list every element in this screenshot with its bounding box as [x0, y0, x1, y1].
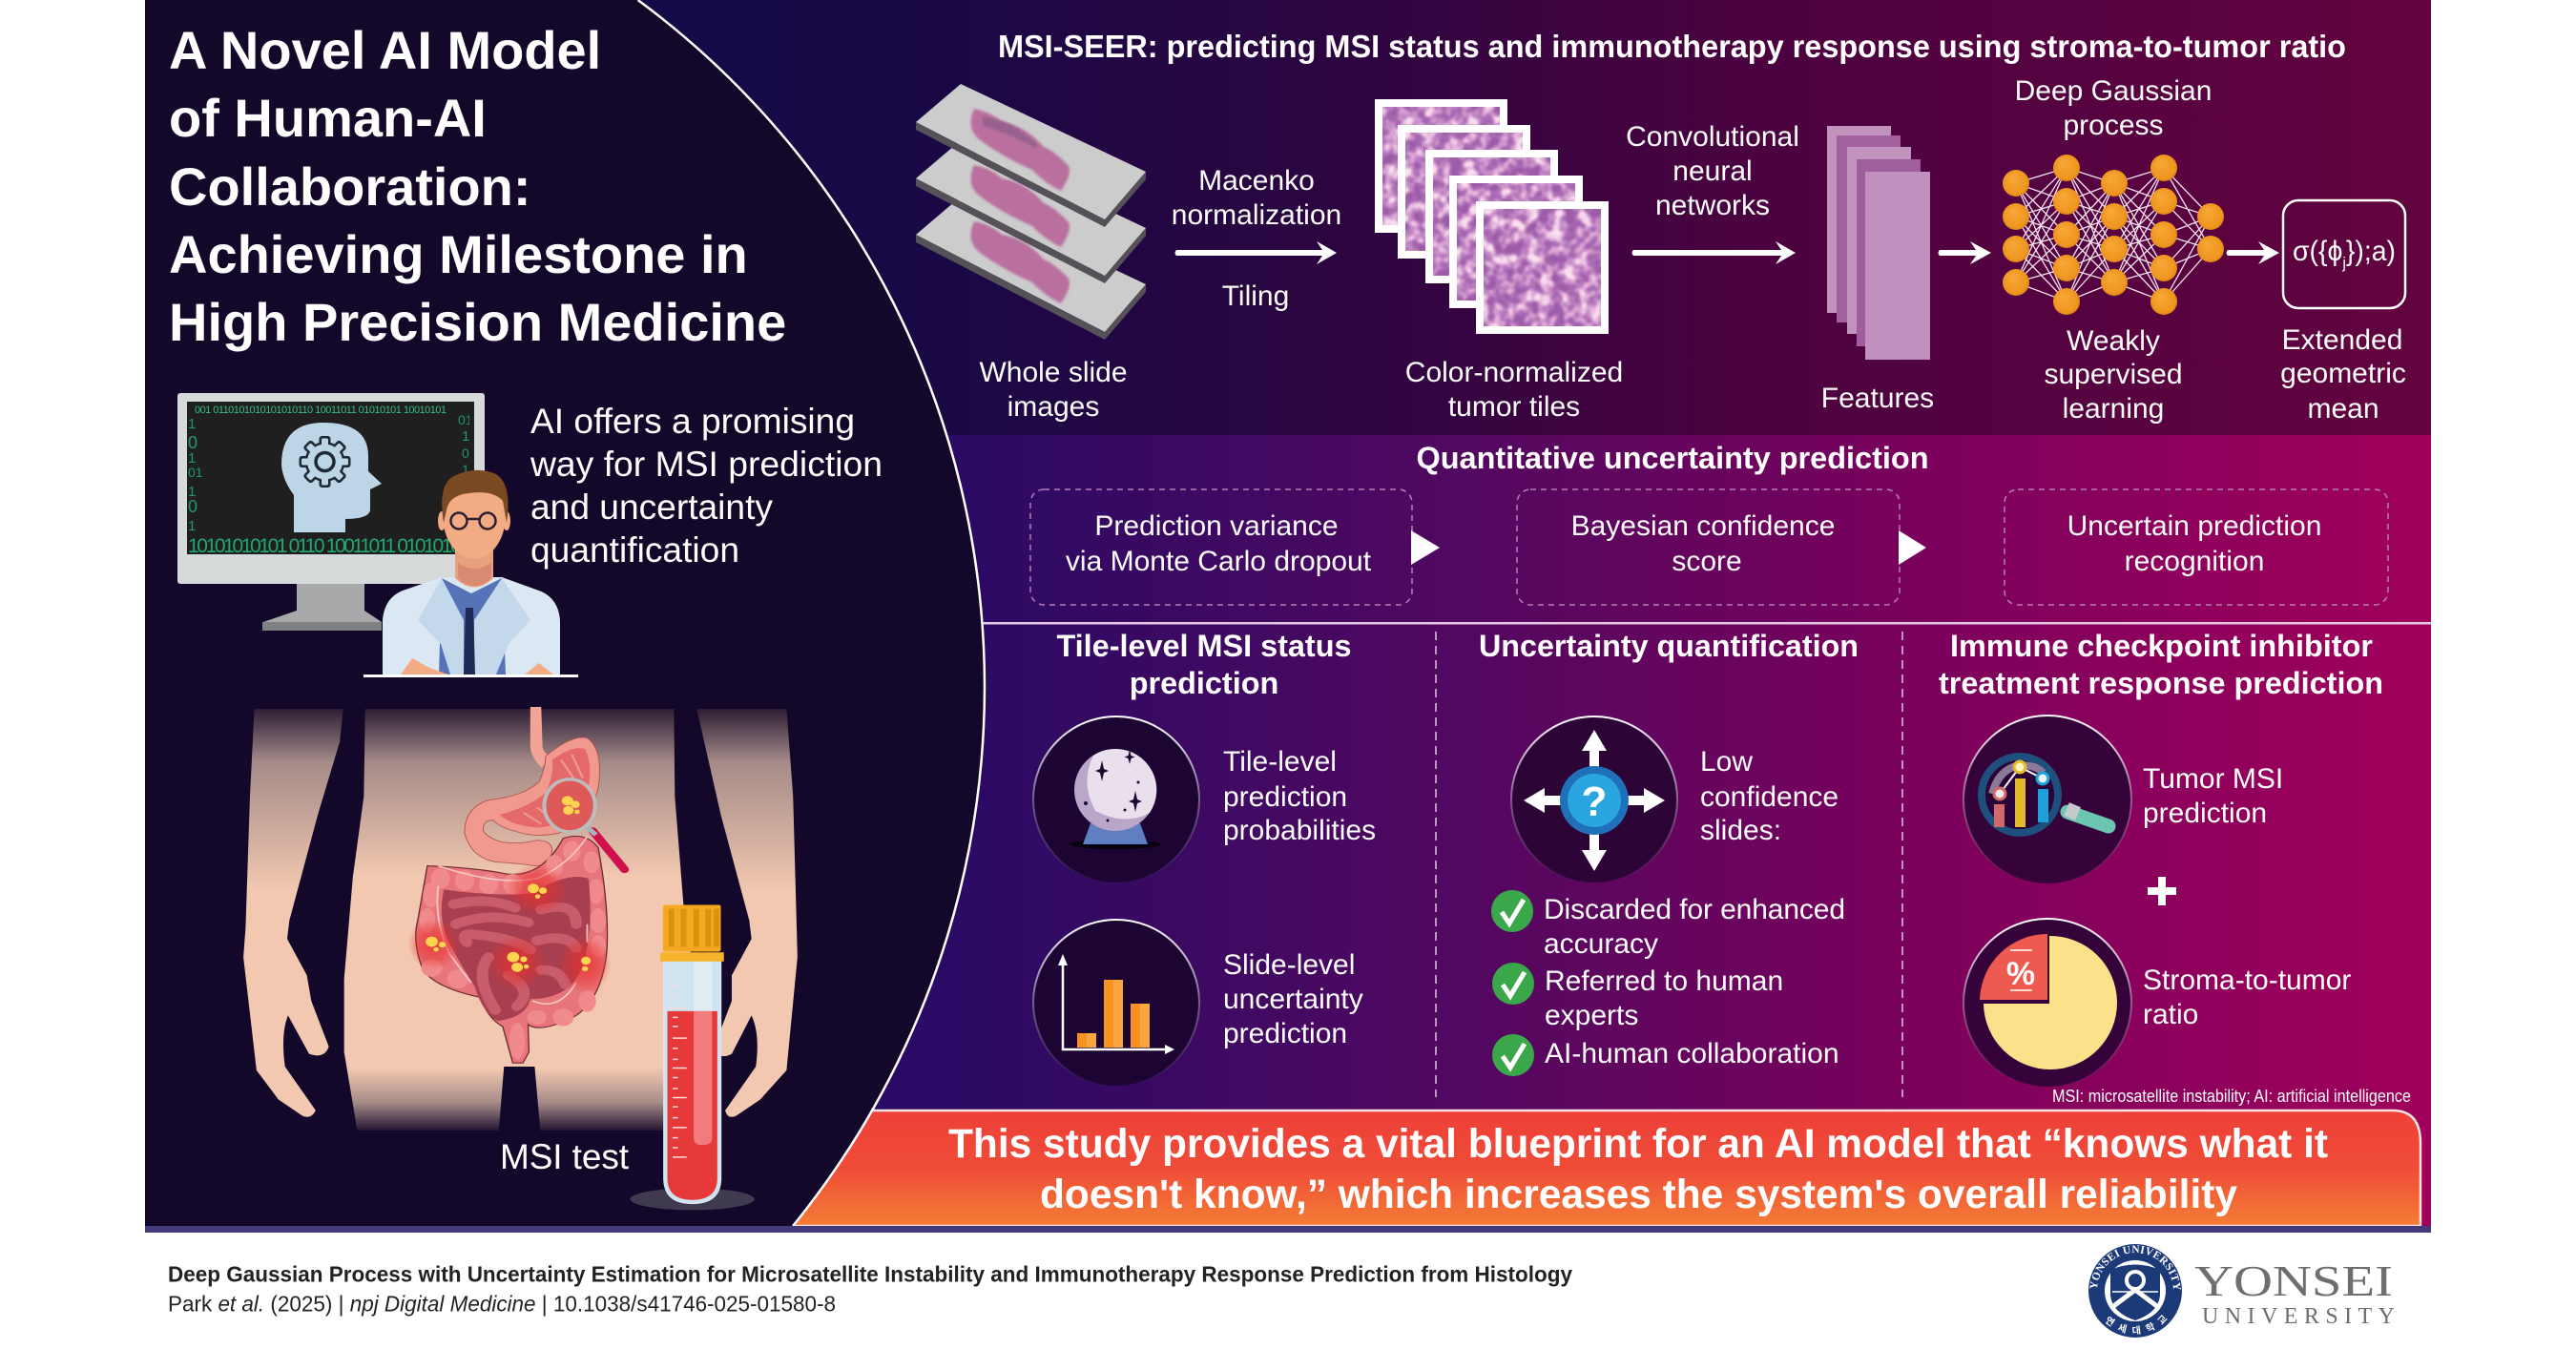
column: uncertainty quantification [1479, 629, 1859, 1076]
colon and small intestine [416, 836, 608, 1063]
text: low confidence slides: Low [1700, 746, 1753, 778]
citation: Deep Gaussian Process with Uncertainty Estimation for Microsatellite Instability and Immunotherapy Response Prediction from Histology [168, 1261, 1572, 1286]
logo: Yonsei University [2088, 1244, 2395, 1338]
label: whole slide images [979, 357, 1128, 423]
callout: conclusion banner text [948, 1121, 2328, 1216]
item: discarded [1491, 890, 1845, 960]
label: convolutional neural networks [1626, 121, 1799, 221]
label: tumor tiles: tumor tiles [1448, 391, 1580, 423]
box: Bayesian confidence score: Bayesian confidence [1571, 510, 1835, 542]
title: Achieving Milestone in [169, 224, 748, 284]
icon: whole slide images [916, 84, 1146, 340]
text: low confidence slides [1700, 746, 1839, 846]
label: extended geometric mean: mean [2307, 393, 2379, 425]
citation: Park et al. (2025) | npj Digital Medicine | 10.1038/s41746-025-01580-8 [168, 1292, 836, 1317]
icon: blood test tube [630, 904, 755, 1210]
callout: conclusion banner text: This study provides a vital blueprint for an AI model that “knows what it [948, 1121, 2328, 1166]
callout: conclusion banner text: doesn't know,” which increases the system's overall reliability [1040, 1172, 2237, 1216]
heading: quantitative uncertainty prediction: Quantitative uncertainty prediction [1416, 441, 1929, 475]
box: formula: j [2341, 254, 2346, 272]
label: tumor tiles: Color-normalized [1405, 357, 1623, 388]
icon: university seal [2088, 1244, 2182, 1338]
title: High Precision Medicine [169, 292, 786, 352]
label: whole slide images: Whole slide [979, 357, 1128, 388]
label: weakly supervised learning: Weakly [2067, 325, 2160, 357]
arrow: CNN [1631, 241, 1796, 264]
icon: AI monitor: 1 [188, 450, 196, 467]
label: whole slide images: images [1008, 391, 1099, 423]
column: immune checkpoint inhibitor response [1939, 629, 2383, 1087]
label: extended geometric mean: geometric [2280, 358, 2406, 389]
label: convolutional neural networks: networks [1655, 190, 1770, 221]
box: uncertain prediction recognition: Uncertain prediction [2067, 510, 2321, 542]
text: slide-level uncertainty prediction: uncertainty [1223, 984, 1363, 1015]
text: tile-level prediction probabilities [1223, 746, 1376, 846]
esophagus and stomach [465, 707, 600, 866]
icon: crystal ball [1033, 716, 1199, 882]
heading: Immune checkpoint inhibitor [1950, 629, 2373, 663]
item: discarded: accuracy [1544, 928, 1658, 960]
label: Macenko normalization: normalization [1172, 199, 1341, 231]
label: convolutional neural networks: Convolutional [1626, 121, 1799, 153]
text: tumor MSI prediction: prediction [2143, 798, 2267, 829]
label: deep Gaussian process: Deep Gaussian [2015, 75, 2212, 107]
icon: AI monitor: 01 [188, 465, 203, 480]
text: slide-level uncertainty prediction: prediction [1223, 1018, 1347, 1049]
box: prediction variance: via Monte Carlo dropout [1066, 546, 1372, 577]
text: tumor MSI prediction [2143, 763, 2283, 829]
box: formula: });a) [2346, 236, 2396, 267]
icon: stroma-to-tumor pie [1963, 919, 2131, 1087]
item: discarded: Discarded for enhanced [1544, 894, 1845, 925]
box: prediction variance [1030, 489, 1412, 605]
arrow: tiling [1175, 241, 1337, 264]
text block: AI offers [530, 402, 883, 570]
icon: plus [2148, 877, 2176, 905]
icon: color-normalized tumor tiles [1375, 99, 1609, 334]
illustration: torso with digestive system [243, 707, 798, 1131]
box: formula: σ({ϕ [2293, 236, 2345, 267]
icon: bar chart [1033, 920, 1199, 1086]
label: weakly supervised learning [2044, 325, 2183, 425]
icon: university seal: YONSEI UNIVERSITY [2089, 1246, 2181, 1290]
text: stroma-to-tumor ratio: ratio [2143, 999, 2198, 1030]
icon: AI monitor: 0 [462, 446, 469, 461]
text: tile-level prediction probabilities: prediction [1223, 781, 1347, 813]
text: slide-level uncertainty prediction [1223, 949, 1363, 1049]
icon: AI monitor: 01 [458, 412, 473, 427]
icon: AI monitor: 0 [188, 433, 197, 452]
label: Macenko normalization: Macenko [1198, 165, 1315, 197]
icon: AI monitor: 001 0110101010101010110 10011011 01010101 10010101 [195, 405, 447, 416]
icon: stroma-to-tumor pie: % [2006, 956, 2035, 992]
text: slide-level uncertainty prediction: Slide-level [1223, 949, 1355, 981]
text block: AI offers: way for MSI prediction [530, 445, 883, 484]
label: features: Features [1821, 383, 1934, 414]
icon: neural network [2003, 155, 2224, 315]
arrow: to network [1939, 241, 1991, 264]
box: formula [2283, 200, 2405, 308]
icon: gear [300, 436, 351, 488]
icon: AI monitor: 0 [188, 497, 197, 516]
heading: prediction [1130, 666, 1278, 700]
icon: AI monitor: 10 [462, 462, 477, 477]
text block: AI offers: and uncertainty [530, 488, 773, 527]
icon: magnifier [544, 779, 625, 869]
box: uncertain prediction recognition [2005, 489, 2388, 605]
label: convolutional neural networks: neural [1672, 156, 1753, 187]
heading [1939, 629, 2383, 700]
icon: doctor [364, 470, 578, 677]
checklist [1491, 890, 1845, 1076]
label: tumor tiles [1405, 357, 1623, 423]
text: low confidence slides: confidence [1700, 781, 1839, 813]
heading: MSI-SEER pipeline: MSI-SEER: predicting MSI status and immunotherapy response using stroma-to-tumor ratio [998, 29, 2346, 64]
text: tumor MSI prediction: Tumor MSI [2143, 763, 2283, 795]
item: referred: experts [1545, 1000, 1638, 1031]
arrow: to uncertain recognition [1899, 530, 1926, 565]
label: weakly supervised learning: supervised [2044, 359, 2183, 390]
title: A Novel AI Model [169, 20, 601, 80]
text block: AI offers: AI offers a promising [530, 402, 855, 441]
text: stroma-to-tumor ratio [2143, 965, 2351, 1030]
text: stroma-to-tumor ratio: Stroma-to-tumor [2143, 965, 2351, 996]
citation [168, 1261, 1572, 1317]
icon: AI monitor: 10101010101 0110 10011011 01010101 [188, 535, 470, 557]
heading: Tile-level MSI status [1056, 629, 1352, 663]
label: tiling: Tiling [1222, 280, 1289, 312]
icon: tumor MSI magnifier chart [1963, 716, 2131, 883]
text: tile-level prediction probabilities: Tile-level [1223, 746, 1337, 778]
title: of Human-AI [169, 88, 487, 148]
heading: Uncertainty quantification [1479, 629, 1859, 663]
logo: Yonsei University: YONSEI [2194, 1256, 2393, 1305]
heading: treatment response prediction [1939, 666, 2383, 700]
column: tile-level MSI status prediction [1033, 629, 1376, 1086]
box: Bayesian confidence score [1517, 489, 1900, 605]
tumors [407, 864, 612, 993]
label: MSI test: MSI test [500, 1137, 630, 1176]
box: Bayesian confidence score: score [1672, 546, 1742, 577]
text block: AI offers: quantification [530, 530, 739, 570]
icon: AI monitor: 1 [188, 484, 196, 500]
item: referred [1492, 963, 1783, 1031]
heading [1056, 629, 1352, 700]
box: prediction variance: Prediction variance [1094, 510, 1339, 542]
logo: Yonsei University: UNIVERSITY [2202, 1304, 2395, 1329]
label: deep Gaussian process [2015, 75, 2212, 141]
label: deep Gaussian process: process [2063, 110, 2164, 141]
item: collaboration [1492, 1034, 1839, 1076]
arrow: to Bayesian score [1411, 530, 1440, 565]
text: tile-level prediction probabilities: probabilities [1223, 815, 1376, 846]
box: uncertain prediction recognition: recognition [2125, 546, 2264, 577]
label: extended geometric mean: Extended [2282, 324, 2402, 356]
icon: AI monitor: 1 [188, 416, 196, 432]
title [169, 20, 786, 352]
footnote: abbreviations: MSI: microsatellite instability; AI: artificial intelligence [2052, 1087, 2411, 1106]
icon: AI monitor: 1 [188, 518, 196, 534]
label: weakly supervised learning: learning [2063, 393, 2164, 425]
icon: university seal: 연세대학교 [2106, 1315, 2168, 1335]
icon: low confidence question arrows: ? [1582, 778, 1607, 825]
text: low confidence slides: slides: [1700, 815, 1781, 846]
item: referred: Referred to human [1545, 965, 1783, 997]
icon: low confidence question arrows [1511, 716, 1677, 882]
icon: AI monitor: 1 [462, 428, 469, 445]
arrow: to output [2227, 241, 2279, 264]
label: Macenko normalization [1172, 165, 1341, 231]
title: Collaboration: [169, 156, 531, 217]
icon: feature stack [1827, 126, 1930, 360]
item: collaboration: AI-human collaboration [1545, 1038, 1839, 1069]
icon: AI monitor [177, 393, 485, 631]
label: extended geometric mean [2280, 324, 2406, 425]
